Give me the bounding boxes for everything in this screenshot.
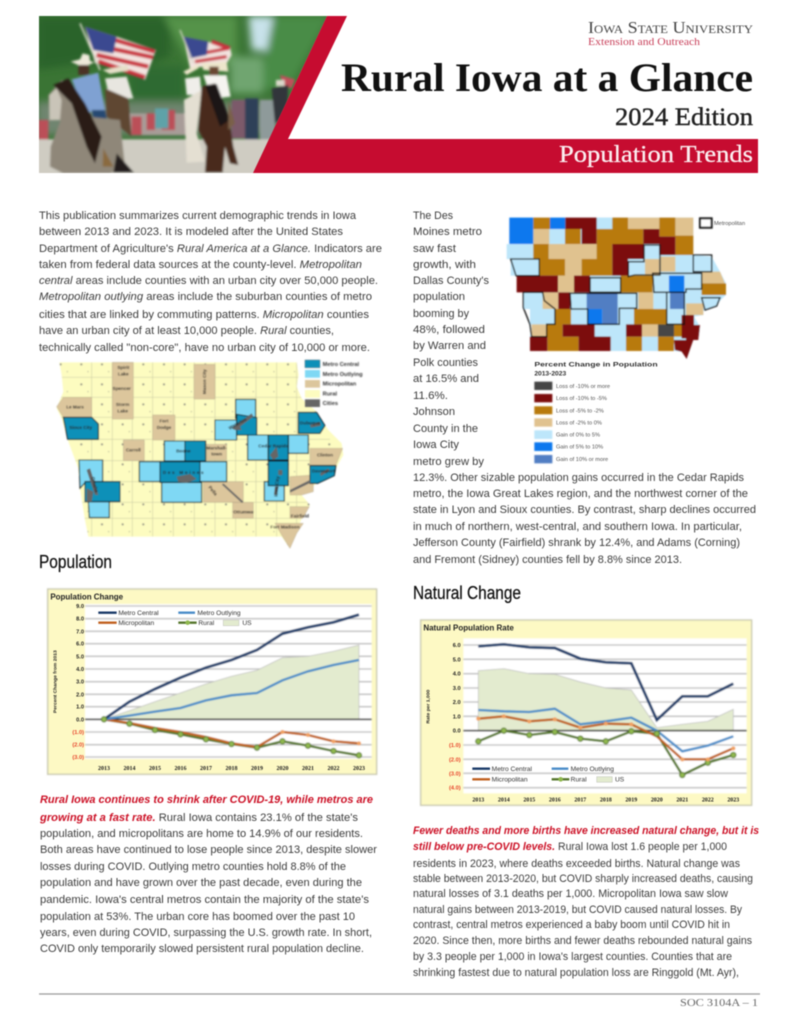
axis labels: 2021 xyxy=(302,766,314,772)
left article text: Rural Iowa continues to shrink after COVID-19, while metros are xyxy=(40,794,373,806)
map labels: Dubuque xyxy=(300,420,320,425)
edition: 2024 Edition xyxy=(615,104,754,131)
chart legend: Metro Central xyxy=(118,610,159,617)
axis labels: Rate per 1,000 xyxy=(425,690,431,724)
axis labels: 9.0 xyxy=(76,604,84,610)
map legend: Micropolitan xyxy=(323,382,357,388)
axis labels: 6.0 xyxy=(453,643,461,649)
axis labels: Natural Population Rate xyxy=(423,624,514,633)
right column text wrapping the map: 48%, followed xyxy=(413,324,485,336)
far rider xyxy=(272,85,288,123)
light blue counties xyxy=(507,218,720,351)
map labels: Sioux City xyxy=(69,425,92,430)
intro text block: Department of Agriculture's Rural America at a Glance. Indicators are xyxy=(39,243,382,255)
map: Iowa county classification xyxy=(50,355,363,555)
state outline rural fill xyxy=(57,362,343,548)
axis labels: 2019 xyxy=(625,798,637,804)
axis labels: 3.0 xyxy=(76,680,84,686)
bright blue counties xyxy=(509,218,684,324)
axis labels: (1.0) xyxy=(449,743,461,749)
axis labels: 0.0 xyxy=(76,717,84,723)
map labels: Storm xyxy=(116,402,129,407)
right column text wrapping the map: state in Lyon and Sioux counties. By contrast, sharp declines occurred xyxy=(413,504,756,516)
right column text wrapping the map: and Fremont (Sidney) counties fell by 8.8% since 2013. xyxy=(413,554,682,566)
axis labels: 2021 xyxy=(676,798,688,804)
metro outlying counties xyxy=(79,399,308,518)
chart legend: US xyxy=(242,620,252,627)
map labels: Lake xyxy=(118,372,129,377)
intro text block: technically called "non-core", have no urban city of 10,000 or more. xyxy=(39,342,370,354)
axis labels: 2013 xyxy=(472,798,484,804)
map legend text: 2013-2023 xyxy=(534,371,566,378)
map labels: Marshall- xyxy=(206,445,227,450)
chart legend: Micropolitan xyxy=(118,620,155,627)
chart legend: US xyxy=(615,777,625,784)
map labels: Iowa City xyxy=(273,476,280,497)
chart legend: Rural xyxy=(198,620,215,627)
map legend text: Metropolitan xyxy=(714,221,745,227)
brown counties xyxy=(533,218,726,351)
right column text wrapping the map: metro grew by xyxy=(413,456,484,468)
axis labels: 4.0 xyxy=(76,667,84,673)
map labels: Davenport xyxy=(312,468,335,473)
axis labels: 2017 xyxy=(574,798,586,804)
map legend text: Loss of -2% to 0% xyxy=(556,420,602,426)
map labels: Carroll xyxy=(126,448,141,453)
right column text wrapping the map: in much of northern, west-central, and southern Iowa. In particular, xyxy=(413,521,742,533)
header banner xyxy=(37,16,758,180)
map labels: Cedar Rapids xyxy=(258,444,289,449)
map legend text: Gain of 0% to 5% xyxy=(556,433,600,439)
right column text wrapping the map: at 16.5% and xyxy=(413,373,479,385)
right article text: Fewer deaths and more births have increased natural change, but it is xyxy=(413,825,759,837)
right article text: natural losses of 3.1 deaths per 1,000. Micropolitan Iowa saw slow xyxy=(413,888,728,900)
right column text wrapping the map: 12.3%. Other sizable population gains occurred in the Cedar Rapids xyxy=(413,472,744,484)
right column text wrapping the map: Iowa City xyxy=(413,439,459,451)
axis labels xyxy=(50,592,365,772)
axis labels: 3.0 xyxy=(453,686,461,692)
map labels: Fort xyxy=(159,418,169,423)
state silhouette base xyxy=(507,218,726,359)
map labels: Des Moines xyxy=(163,470,205,475)
chart legend: Micropolitan xyxy=(492,777,528,784)
right article text: shrinking fastest due to natural population loss are Ringgold (Mt. Ayr), xyxy=(413,967,739,979)
map legend text: Loss of -10% to -5% xyxy=(556,396,607,402)
right article text: 2020. Since then, more births and fewer deaths rebounded natural gains xyxy=(413,935,752,947)
axis labels: 7.0 xyxy=(76,629,84,635)
tan counties xyxy=(532,218,725,337)
right column text wrapping the map: population xyxy=(413,291,465,303)
right article text: residents in 2023, where deaths exceeded births. Natural change was xyxy=(413,858,740,870)
map legend text: Gain of 5% to 10% xyxy=(556,445,603,451)
axis labels: Population Change xyxy=(50,592,124,601)
axis labels: 2023 xyxy=(353,766,365,772)
map labels: Pella xyxy=(207,485,218,497)
left article text: population, and micropolitans are home to 14.9% of our residents. xyxy=(40,828,363,840)
axis labels: 2015 xyxy=(149,766,161,772)
left article text: population and have grown over the past decade, even during the xyxy=(40,877,362,889)
right flag xyxy=(183,37,232,68)
right article text: stable between 2013-2020, but COVID sharply increased deaths, causing xyxy=(413,873,753,885)
chart: natural population rate xyxy=(421,620,752,805)
map labels: Spencer xyxy=(112,386,131,391)
axis labels: (2.0) xyxy=(72,743,84,749)
axis labels: (3.0) xyxy=(449,771,461,777)
small flag far xyxy=(280,75,295,88)
chart legend: Metro Outlying xyxy=(197,610,241,617)
chart legend: Rural xyxy=(571,777,587,784)
map labels: Clinton xyxy=(317,453,333,458)
map legend xyxy=(305,360,363,407)
right column text wrapping the map: growth, with xyxy=(413,259,476,271)
axis labels: 2022 xyxy=(327,766,339,772)
main rider xyxy=(71,53,94,67)
right column text wrapping the map: by Warren and xyxy=(413,340,486,352)
heading: Natural Change: Natural Change xyxy=(413,583,521,603)
left article text xyxy=(39,794,377,955)
right riders xyxy=(183,62,228,75)
map legend text: Loss of -5% to -2% xyxy=(556,408,604,414)
intro text block: central areas include counties with an urban city over 50,000 people. xyxy=(39,275,378,287)
dark hatch county xyxy=(658,324,674,337)
right column text wrapping the map: Dallas County's xyxy=(413,275,489,287)
right column text wrapping the map: saw fast xyxy=(413,243,456,255)
map labels xyxy=(66,365,335,529)
axis labels: 2020 xyxy=(651,798,663,804)
title: Rural Iowa at a Glance xyxy=(341,55,753,100)
axis labels: 2018 xyxy=(600,798,612,804)
map legend text: Loss of -10% or more xyxy=(556,384,610,390)
axis labels: 2023 xyxy=(727,798,739,804)
axis labels xyxy=(423,624,739,804)
chart legend: Metro Central xyxy=(492,766,533,773)
right column text wrapping the map: booming by xyxy=(413,308,469,320)
right column text wrapping the map: County in the xyxy=(413,423,478,435)
map labels: Ottumwa xyxy=(233,509,254,514)
intro text block: taken from federal data sources at the county-level. Metropolitan xyxy=(39,259,362,271)
logo: Iowa State University xyxy=(588,18,753,48)
intro text block: have an urban city of at least 10,000 people. Rural counties, xyxy=(39,325,334,337)
map legend: Metro Central xyxy=(323,362,360,368)
hatched blue counties xyxy=(587,292,684,324)
axis labels: 2014 xyxy=(124,766,135,772)
chart legend xyxy=(472,766,625,784)
axis labels: 2015 xyxy=(523,798,535,804)
red slanted band and title bar xyxy=(253,16,758,173)
axis labels: 2022 xyxy=(702,798,714,804)
map legend text xyxy=(534,221,745,463)
left article text: COVID only temporarily slowed persistent rural population decline. xyxy=(40,943,364,955)
right article text: still below pre-COVID levels. Rural Iowa lost 1.6 people per 1,000 xyxy=(413,841,727,853)
intro text block: between 2013 and 2023. It is modeled after the United States xyxy=(39,226,343,238)
axis labels: (1.0) xyxy=(72,730,84,736)
map labels: Mason City xyxy=(202,369,207,394)
right column text wrapping the map: 11.6%. xyxy=(413,390,448,402)
map legend text: Percent Change in Population xyxy=(534,361,658,368)
axis labels: 2019 xyxy=(251,766,263,772)
map labels: Boone xyxy=(176,448,191,453)
right column text wrapping the map: Johnson xyxy=(413,406,455,418)
axis labels: 2017 xyxy=(200,766,212,772)
map labels: Le Mars xyxy=(66,404,84,409)
axis labels: Percent Change from 2013 xyxy=(53,650,59,713)
logo: Iowa State University: Iowa State University xyxy=(588,18,753,37)
chart legend: Metro Outlying xyxy=(571,766,614,773)
blurred tree and background tones xyxy=(38,16,326,139)
right column text wrapping the map xyxy=(413,210,756,566)
axis labels: 2018 xyxy=(225,766,237,772)
axis labels: (4.0) xyxy=(449,786,461,792)
cities xyxy=(87,413,329,503)
intro text block: Metropolitan outlying areas include the suburban counties of metro xyxy=(39,291,372,303)
chart: population change xyxy=(48,589,377,774)
right column text wrapping the map: The Des xyxy=(413,210,453,222)
map labels: Lake xyxy=(117,408,128,413)
white horse xyxy=(184,90,205,163)
axis labels: 2014 xyxy=(498,798,510,804)
photo: parade riders with American flags xyxy=(37,16,337,180)
axis labels: 1.0 xyxy=(76,705,84,711)
right article text: natural gains between 2013-2019, but COVID caused natural losses. By xyxy=(413,904,742,916)
section title: Population Trends xyxy=(559,142,753,168)
left article text: population at 53%. The urban core has boomed over the past 10 xyxy=(40,911,355,923)
heading: Population: Population xyxy=(39,552,112,572)
chart legend xyxy=(98,610,252,627)
axis labels: 1.0 xyxy=(453,714,461,720)
right article text: contrast, central metros experienced a baby boom until COVID hit in xyxy=(413,919,730,931)
axis labels: 2020 xyxy=(276,766,288,772)
dark red counties xyxy=(517,218,700,359)
footer: SOC 3104A – 1 xyxy=(680,998,758,1009)
map labels: town xyxy=(211,451,222,456)
axis labels: 2013 xyxy=(98,766,110,772)
metro central counties xyxy=(63,412,336,502)
left article text: Both areas have continued to lose people since 2013, despite slower xyxy=(40,844,377,856)
map labels: Omaha xyxy=(90,476,99,493)
axis labels: 6.0 xyxy=(76,642,84,648)
left flag xyxy=(85,27,156,80)
logo: Iowa State University: Extension and Outreach xyxy=(588,36,701,48)
map legend: Metro Outlying xyxy=(323,372,363,378)
brown horse xyxy=(198,83,238,173)
axis labels: (3.0) xyxy=(72,755,84,761)
right column text wrapping the map: metro, the Iowa Great Lakes region, and the northwest corner of the xyxy=(413,488,748,500)
micropolitan counties xyxy=(57,362,343,548)
right column text wrapping the map: Polk counties xyxy=(413,357,478,369)
axis labels: 4.0 xyxy=(453,672,461,678)
left article text: pandemic. Iowa's central metros contain the majority of the state's xyxy=(40,894,369,906)
axis labels: 2.0 xyxy=(76,692,84,698)
intro text block: This publication summarizes current demographic trends in Iowa xyxy=(39,210,357,222)
right article text: by 3.3 people per 1,000 in Iowa's largest counties. Counties that are xyxy=(413,951,732,963)
map legend xyxy=(534,218,712,463)
axis labels: 2016 xyxy=(549,798,561,804)
axis labels: 5.0 xyxy=(76,654,84,660)
map legend: Rural xyxy=(323,392,338,398)
right column text wrapping the map: Moines metro xyxy=(413,226,482,238)
right column text wrapping the map: Jefferson County (Fairfield) shrank by 12.4%, and Adams (Corning) xyxy=(413,537,740,549)
axis labels: 0.0 xyxy=(453,729,461,735)
axis labels: 2016 xyxy=(175,766,186,772)
right article text xyxy=(413,825,759,979)
left horse xyxy=(48,80,125,173)
left article text: losses during COVID. Outlying metro counties hold 8.8% of the xyxy=(40,861,346,873)
left article text: years, even during COVID, surpassing the U.S. growth rate. In short, xyxy=(40,927,372,939)
axis labels: (2.0) xyxy=(449,757,461,763)
map labels: Waterloo xyxy=(228,417,247,431)
map labels: Fort Madison xyxy=(270,524,300,529)
map labels: Fairfield xyxy=(291,513,309,518)
axis labels: 2.0 xyxy=(453,700,461,706)
left background rider xyxy=(103,65,129,74)
map: percent change in population xyxy=(507,218,745,463)
map labels: Spirit xyxy=(117,365,130,370)
axis labels: 5.0 xyxy=(453,657,461,663)
left article text: growing at a fast rate. Rural Iowa contains 23.1% of the state's xyxy=(39,812,358,824)
metropolitan outlines xyxy=(511,245,720,337)
intro text block: cities that are linked by commuting patterns. Micropolitan counties xyxy=(39,309,370,321)
intro text block xyxy=(39,210,382,354)
axis labels: 8.0 xyxy=(76,617,84,623)
map labels: Dodge xyxy=(157,425,172,430)
map legend: Cities xyxy=(323,401,338,407)
map legend text: Gain of 10% or more xyxy=(556,457,608,463)
